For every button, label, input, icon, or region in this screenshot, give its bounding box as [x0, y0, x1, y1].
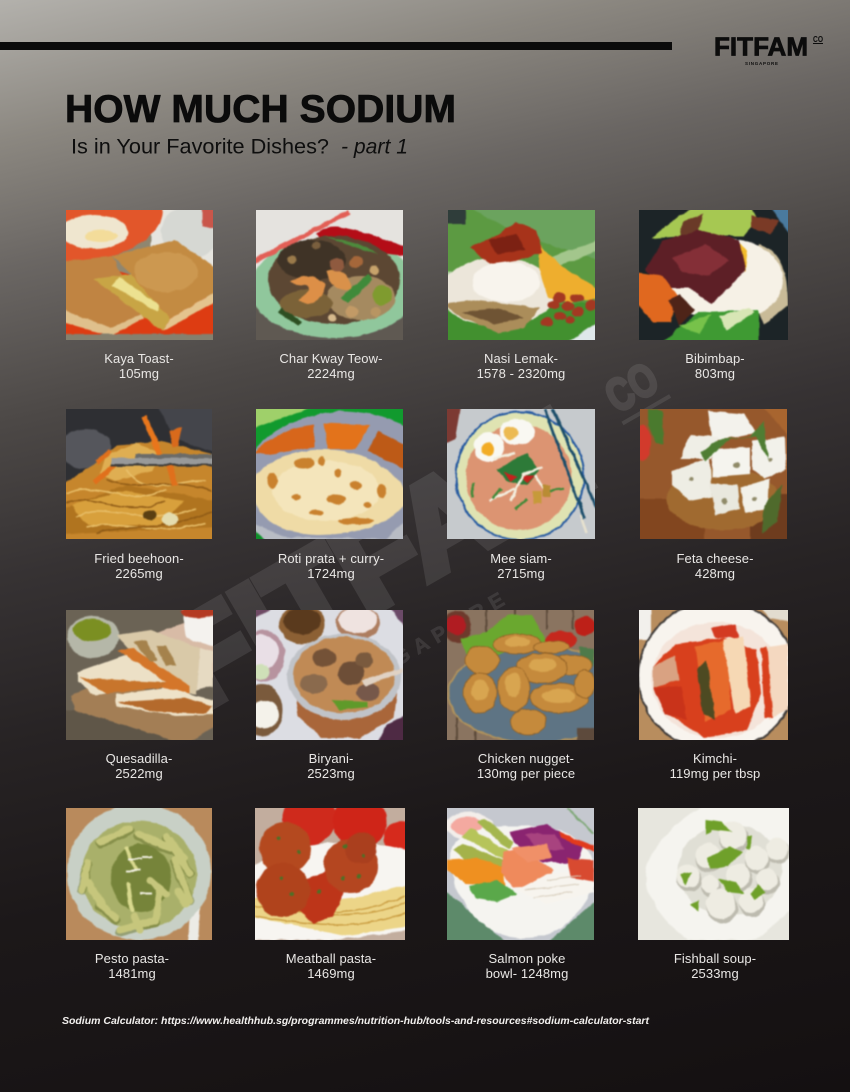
caption: kaya toast: Kaya Toast-	[104, 351, 174, 366]
caption: fried beehoon	[94, 551, 184, 581]
caption: biryani: Biryani-	[309, 751, 353, 766]
caption: mee siam	[490, 551, 552, 581]
subtitle: Is in Your Favorite Dishes?	[71, 134, 329, 158]
caption: biryani	[307, 751, 355, 781]
caption: fishball soup: 2533mg	[691, 966, 739, 981]
photo: kaya toast	[66, 210, 213, 340]
caption: roti prata	[278, 551, 384, 581]
caption: nasi lemak: 1578 - 2320mg	[477, 366, 565, 381]
watermark: FITFAM CO SINGAPORE: FITFAM	[142, 382, 613, 736]
title: HOW MUCH SODIUM	[65, 88, 456, 130]
top black rule	[0, 42, 672, 50]
photo: meatball pasta	[255, 808, 405, 940]
photo: kimchi	[639, 610, 788, 740]
photo: nasi lemak	[448, 210, 595, 340]
logo: FITFAM CO Singapore: FITFAM	[714, 32, 808, 62]
caption: pesto pasta: 1481mg	[108, 966, 156, 981]
caption: fried beehoon: Fried beehoon-	[94, 551, 184, 566]
caption: char kway teow	[279, 351, 383, 381]
caption row 1	[104, 351, 745, 381]
logo: FITFAM CO Singapore: CO	[813, 35, 823, 44]
subtitle: - part 1	[341, 134, 408, 158]
caption: kimchi: 119mg per tbsp	[670, 766, 760, 781]
logo: FITFAM CO Singapore: SINGAPORE	[745, 61, 778, 66]
caption: nasi lemak: Nasi Lemak-	[484, 351, 558, 366]
caption: kaya toast	[104, 351, 174, 381]
caption: chicken nugget: Chicken nugget-	[478, 751, 574, 766]
photo: roti prata	[256, 409, 403, 539]
caption: feta cheese: 428mg	[695, 566, 735, 581]
caption: quesadilla: 2522mg	[115, 766, 163, 781]
photo: biryani	[256, 610, 403, 740]
caption: salmon poke bowl: Salmon poke	[488, 951, 565, 966]
caption: mee siam: 2715mg	[497, 566, 545, 581]
caption: chicken nugget: 130mg per piece	[477, 766, 575, 781]
photo: pesto pasta	[66, 808, 212, 940]
caption: fishball soup	[674, 951, 756, 981]
photo: salmon poke bowl	[447, 808, 594, 940]
photo: fried beehoon	[66, 409, 212, 539]
caption: char kway teow: Char Kway Teow-	[279, 351, 383, 366]
caption: roti prata: 1724mg	[307, 566, 355, 581]
watermark: FITFAM CO SINGAPORE: SINGAPORE	[341, 588, 508, 698]
caption: bibimbap	[685, 351, 745, 381]
caption: roti prata: Roti prata + curry-	[278, 551, 384, 566]
footer: sodium calculator link: Sodium Calculator: https://www.healthhub.sg/programmes/nutrition-hub/tools-and-resources#sodium-calculator-start	[62, 1015, 649, 1027]
caption row 3	[106, 751, 760, 781]
caption: meatball pasta: Meatball pasta-	[286, 951, 376, 966]
caption: chicken nugget	[477, 751, 575, 781]
caption: quesadilla	[106, 751, 172, 781]
caption: salmon poke bowl: bowl- 1248mg	[486, 966, 568, 981]
caption: biryani: 2523mg	[307, 766, 355, 781]
watermark: FITFAM CO SINGAPORE: CO	[596, 352, 667, 423]
photo: char kway teow	[256, 210, 403, 340]
caption: mee siam: Mee siam-	[490, 551, 552, 566]
caption: feta cheese	[676, 551, 754, 581]
caption: fishball soup: Fishball soup-	[674, 951, 756, 966]
caption: salmon poke bowl	[486, 951, 568, 981]
photo: chicken nugget	[447, 610, 594, 740]
caption: pesto pasta	[95, 951, 169, 981]
caption: fried beehoon: 2265mg	[115, 566, 163, 581]
caption: meatball pasta	[286, 951, 376, 981]
caption: kaya toast: 105mg	[119, 366, 159, 381]
photo: mee siam	[447, 409, 595, 539]
caption: bibimbap: 803mg	[695, 366, 735, 381]
caption: kimchi: Kimchi-	[693, 751, 737, 766]
photo: bibimbap	[639, 210, 788, 340]
caption: kimchi	[670, 751, 760, 781]
caption: char kway teow: 2224mg	[307, 366, 355, 381]
caption: feta cheese: Feta cheese-	[676, 551, 754, 566]
photo: fishball soup	[638, 808, 789, 940]
photo: quesadilla	[66, 610, 213, 740]
caption: meatball pasta: 1469mg	[307, 966, 355, 981]
photo: feta cheese	[640, 409, 787, 539]
caption: pesto pasta: Pesto pasta-	[95, 951, 169, 966]
caption: nasi lemak	[477, 351, 565, 381]
caption: quesadilla: Quesadilla-	[106, 751, 172, 766]
caption: bibimbap: Bibimbap-	[685, 351, 745, 366]
caption row 2	[94, 551, 754, 581]
